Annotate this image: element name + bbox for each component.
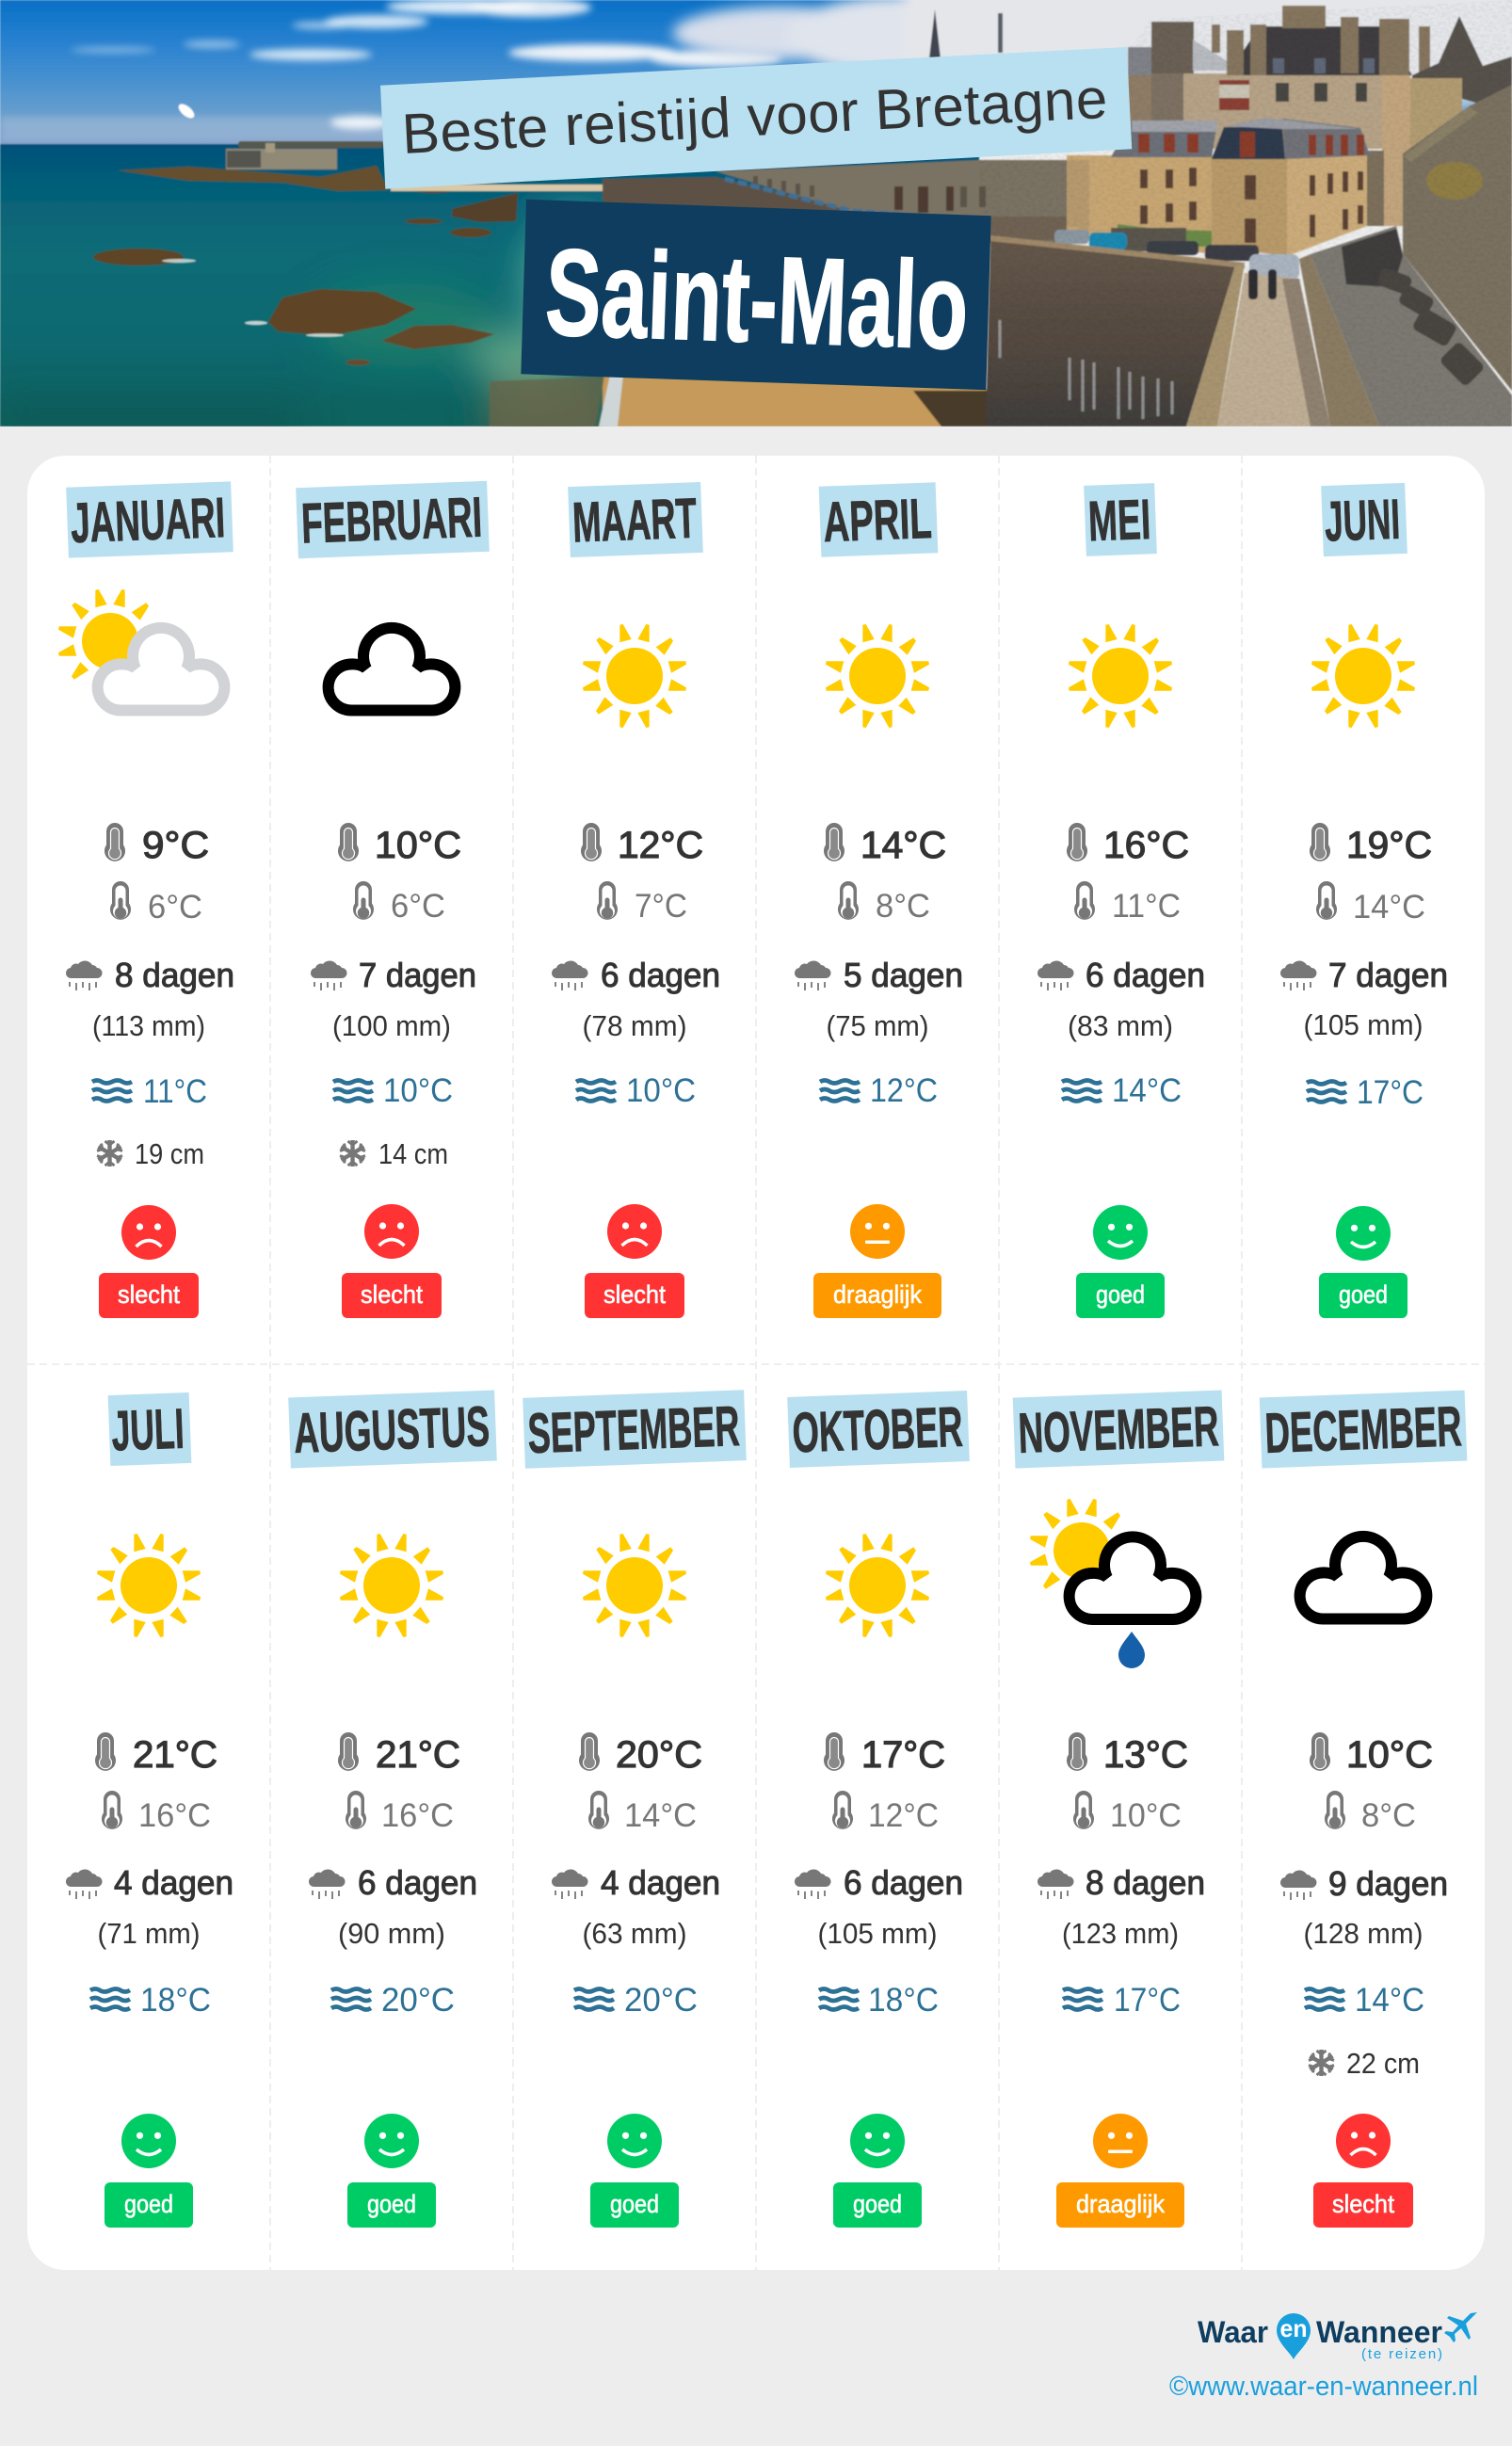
- precipitation: (128 mm): [1303, 1917, 1424, 1950]
- precipitation: (78 mm): [582, 1009, 687, 1042]
- low temperature: [1316, 881, 1425, 925]
- icon: sad face: [607, 1204, 662, 1259]
- month label: april: [819, 482, 938, 557]
- rating badge: goed: [853, 2190, 902, 2218]
- low temperature: 16°C: [381, 1797, 454, 1834]
- panel: december: [1242, 1364, 1485, 2270]
- sea temperature: [1305, 1982, 1424, 2019]
- low temperature: 8°C: [1361, 1797, 1416, 1834]
- rating badge: [1319, 1273, 1407, 1318]
- rating badge: draaglijk: [1076, 2190, 1165, 2218]
- month label: augustus: AUGUSTUS: [293, 1394, 491, 1465]
- icon: sun: [583, 1534, 686, 1637]
- month label: september: SEPTEMBER: [526, 1394, 741, 1465]
- high temperature: 17°C: [861, 1734, 945, 1776]
- icon: cloud: [329, 628, 455, 711]
- high temperature: [824, 823, 946, 866]
- logo: Waar en Wanneer: [1198, 2312, 1477, 2362]
- icon: airplane: [1444, 2312, 1477, 2342]
- month label: september: [523, 1390, 747, 1469]
- rating badge: goed: [367, 2190, 416, 2218]
- rain days: 4 dagen: [601, 1863, 720, 1902]
- icon: sad face: [364, 1204, 419, 1259]
- icon: sun: [97, 1534, 201, 1637]
- banner: title Saint-Malo: Saint-Malo: [543, 222, 971, 376]
- low temperature: 12°C: [868, 1797, 939, 1834]
- banner: subtitle: [380, 47, 1132, 189]
- sea temperature: [92, 1073, 207, 1110]
- low temperature: [1074, 881, 1181, 925]
- rating badge: slecht: [1332, 2190, 1394, 2218]
- snow: [1309, 2047, 1420, 2080]
- high temperature: [1310, 823, 1432, 866]
- rating badge: goed: [1096, 1280, 1145, 1309]
- icon: sad face: [1336, 2114, 1391, 2168]
- low temperature: [110, 881, 202, 925]
- month label: oktober: [787, 1391, 970, 1468]
- sea temperature: [90, 1982, 211, 2019]
- website url: ©www.waar-en-wanneer.nl: [1169, 2372, 1478, 2402]
- high temperature: [1067, 823, 1189, 866]
- rating badge: [1076, 1273, 1165, 1318]
- icon: sun: [1069, 624, 1172, 728]
- high temperature: 21°C: [376, 1734, 460, 1776]
- precipitation: (75 mm): [827, 1009, 928, 1042]
- icon: happy face: [850, 2114, 905, 2168]
- month label: februari: FEBRUARI: [300, 486, 483, 555]
- panel: september: [513, 1364, 756, 2270]
- rating badge: [590, 2182, 679, 2228]
- sea temperature: [819, 1982, 939, 2019]
- rain days: 8 dagen: [1086, 1863, 1205, 1902]
- low temperature: [588, 1791, 697, 1834]
- panel: oktober: [756, 1364, 999, 2270]
- snow: 14 cm: [378, 1137, 448, 1170]
- rain days: 6 dagen: [1086, 956, 1205, 994]
- sea temperature: 12°C: [870, 1072, 938, 1109]
- icon: happy face: [364, 2114, 419, 2168]
- low temperature: [353, 881, 445, 925]
- rain days: 9 dagen: [1328, 1864, 1448, 1903]
- high temperature: 10°C: [375, 825, 461, 866]
- icon: location pin: [1277, 2313, 1311, 2359]
- rain days: [311, 956, 476, 994]
- rain days: 5 dagen: [844, 956, 963, 994]
- hero photo: Saint-Malo coast and ramparts: [0, 0, 1512, 443]
- panel: monthly climate card: [27, 456, 1485, 2270]
- low temperature: 6°C: [391, 888, 445, 925]
- sea temperature: 18°C: [140, 1982, 211, 2019]
- low temperature: [102, 1791, 211, 1834]
- rain days: 6 dagen: [601, 956, 720, 994]
- rain days: 6 dagen: [358, 1863, 477, 1902]
- rain days: 7 dagen: [359, 956, 476, 994]
- precipitation: (105 mm): [817, 1917, 938, 1950]
- month label: augustus: [288, 1391, 497, 1468]
- sea temperature: [1063, 1982, 1181, 2019]
- sea temperature: 20°C: [381, 1982, 455, 2019]
- precipitation: (83 mm): [1068, 1009, 1173, 1042]
- rating badge: [342, 1273, 442, 1318]
- rain days: [66, 956, 234, 994]
- icon: location pin: en: [1280, 2314, 1307, 2342]
- month label: juni: JUNI: [1324, 488, 1401, 554]
- rating badge: [585, 1273, 684, 1318]
- snow: 22 cm: [1346, 2047, 1420, 2080]
- sea temperature: [574, 1982, 698, 2019]
- panel: mei: [999, 456, 1242, 1364]
- sea temperature: 11°C: [143, 1073, 207, 1110]
- high temperature: 13°C: [1103, 1734, 1188, 1776]
- month label: juni: [1321, 483, 1407, 556]
- rain days: 8 dagen: [115, 956, 234, 994]
- banner: subtitle: Beste reistijd voor Bretagne: [400, 67, 1109, 166]
- sea temperature: 10°C: [626, 1072, 696, 1109]
- high temperature: [338, 1732, 460, 1776]
- high temperature: 21°C: [133, 1734, 217, 1776]
- low temperature: [346, 1791, 454, 1834]
- icon: sun: [826, 1534, 929, 1637]
- panel: maart: [513, 456, 756, 1364]
- icon: neutral face: [1093, 2114, 1148, 2168]
- rating badge: slecht: [361, 1280, 423, 1309]
- month label: maart: MAART: [571, 487, 698, 554]
- low temperature: 6°C: [148, 889, 202, 925]
- low temperature: 14°C: [1353, 889, 1425, 925]
- banner: title Saint-Malo: [521, 200, 991, 390]
- panel: februari: [270, 456, 513, 1364]
- precipitation: (105 mm): [1303, 1008, 1424, 1041]
- low temperature: [1073, 1791, 1182, 1834]
- precipitation: (90 mm): [338, 1917, 445, 1950]
- icon: sun: [583, 624, 686, 728]
- sea temperature: [820, 1072, 938, 1109]
- rain days: [552, 1863, 720, 1902]
- sea temperature: 10°C: [383, 1072, 453, 1109]
- sea temperature: 20°C: [624, 1982, 698, 2019]
- precipitation: (71 mm): [98, 1917, 200, 1950]
- icon: partly cloudy: [58, 589, 224, 711]
- icon: sun: [1311, 624, 1415, 728]
- high temperature: [1310, 1732, 1433, 1776]
- low temperature: [838, 881, 930, 925]
- month label: november: NOVEMBER: [1017, 1394, 1220, 1465]
- rain days: 7 dagen: [1328, 956, 1448, 994]
- month label: januari: JANUARI: [70, 486, 226, 555]
- logo: Waar en Wanneer: (te reizen): [1361, 2346, 1442, 2362]
- low temperature: 7°C: [635, 888, 687, 925]
- snow: [97, 1137, 204, 1170]
- panel: juni: [1242, 456, 1485, 1364]
- rating badge: goed: [1339, 1280, 1388, 1309]
- sea temperature: 17°C: [1357, 1074, 1424, 1111]
- high temperature: [105, 823, 209, 866]
- month label: mei: [1084, 483, 1157, 556]
- rating badge: [99, 1273, 199, 1318]
- rating badge: goed: [124, 2190, 173, 2218]
- rating badge: [347, 2182, 436, 2228]
- rain days: [309, 1863, 477, 1902]
- month label: maart: [568, 482, 703, 557]
- logo: Waar en Wanneer: Waar: [1198, 2315, 1268, 2349]
- rating badge: [1313, 2182, 1413, 2228]
- logo: Waar en Wanneer: Wanneer: [1316, 2315, 1442, 2349]
- high temperature: 20°C: [616, 1734, 702, 1776]
- low temperature: 14°C: [624, 1797, 697, 1834]
- rating badge: slecht: [603, 1280, 666, 1309]
- precipitation: (63 mm): [582, 1917, 687, 1950]
- month label: februari: [296, 481, 490, 558]
- high temperature: [579, 1732, 702, 1776]
- month label: mei: MEI: [1087, 488, 1151, 553]
- sea temperature: [576, 1072, 696, 1109]
- rain days: 4 dagen: [114, 1863, 233, 1902]
- precipitation: (123 mm): [1062, 1917, 1179, 1950]
- month label: juli: JULI: [110, 1397, 185, 1462]
- icon: sun: [340, 1534, 443, 1637]
- icon: sun: [826, 624, 929, 728]
- rating badge: [833, 2182, 922, 2228]
- snow: 19 cm: [135, 1137, 204, 1170]
- rain days: 6 dagen: [844, 1863, 963, 1902]
- sea temperature: [1062, 1072, 1182, 1109]
- high temperature: [1067, 1732, 1188, 1776]
- sea temperature: [333, 1072, 453, 1109]
- rating badge: [105, 2182, 193, 2228]
- month label: oktober: OKTOBER: [791, 1395, 964, 1464]
- month label: april: APRIL: [822, 487, 933, 554]
- rating badge: [1056, 2182, 1184, 2228]
- high temperature: [95, 1732, 217, 1776]
- month label: januari: [66, 481, 233, 558]
- low temperature: [597, 881, 687, 925]
- low temperature: 16°C: [138, 1797, 211, 1834]
- sea temperature: 14°C: [1112, 1072, 1182, 1109]
- rain days: [795, 1863, 963, 1902]
- precipitation: (113 mm): [92, 1009, 205, 1042]
- rating badge: [813, 1273, 941, 1318]
- high temperature: 19°C: [1346, 825, 1432, 866]
- rain days: [795, 956, 963, 994]
- high temperature: 16°C: [1103, 825, 1189, 866]
- panel: november: [999, 1364, 1242, 2270]
- icon: neutral face: [850, 1204, 905, 1259]
- high temperature: [581, 823, 703, 866]
- sea temperature: [1307, 1074, 1424, 1111]
- rain days: [552, 956, 720, 994]
- high temperature: 12°C: [618, 825, 703, 866]
- panel: januari: [27, 456, 270, 1364]
- rating badge: draaglijk: [833, 1280, 922, 1309]
- panel: augustus: [270, 1364, 513, 2270]
- high temperature: [824, 1732, 945, 1776]
- month label: november: [1013, 1390, 1224, 1469]
- icon: sun, cloud and rain drop: [1030, 1499, 1196, 1668]
- icon: happy face: [1336, 1206, 1391, 1261]
- sea temperature: 17°C: [1114, 1982, 1181, 2019]
- high temperature: 14°C: [861, 825, 946, 866]
- low temperature: [1325, 1791, 1416, 1834]
- icon: sad face: [121, 1205, 176, 1260]
- panel: juli: [27, 1364, 270, 2270]
- snow: [340, 1137, 448, 1170]
- icon: happy face: [1093, 1205, 1148, 1260]
- sea temperature: 14°C: [1355, 1982, 1424, 2019]
- month label: juli: [108, 1392, 191, 1466]
- sea temperature: [331, 1982, 455, 2019]
- rating badge: slecht: [118, 1280, 180, 1309]
- panel: april: [756, 456, 999, 1364]
- rating badge: goed: [610, 2190, 659, 2218]
- high temperature: [338, 823, 461, 866]
- icon: happy face: [121, 2114, 176, 2168]
- high temperature: 10°C: [1346, 1734, 1433, 1776]
- precipitation: (100 mm): [332, 1009, 451, 1042]
- low temperature: [832, 1791, 939, 1834]
- low temperature: 8°C: [876, 888, 930, 925]
- low temperature: 11°C: [1112, 888, 1181, 925]
- high temperature: 9°C: [142, 825, 209, 866]
- icon: cloud: [1300, 1537, 1426, 1619]
- icon: happy face: [607, 2114, 662, 2168]
- sea temperature: 18°C: [868, 1982, 939, 2019]
- low temperature: 10°C: [1110, 1797, 1182, 1834]
